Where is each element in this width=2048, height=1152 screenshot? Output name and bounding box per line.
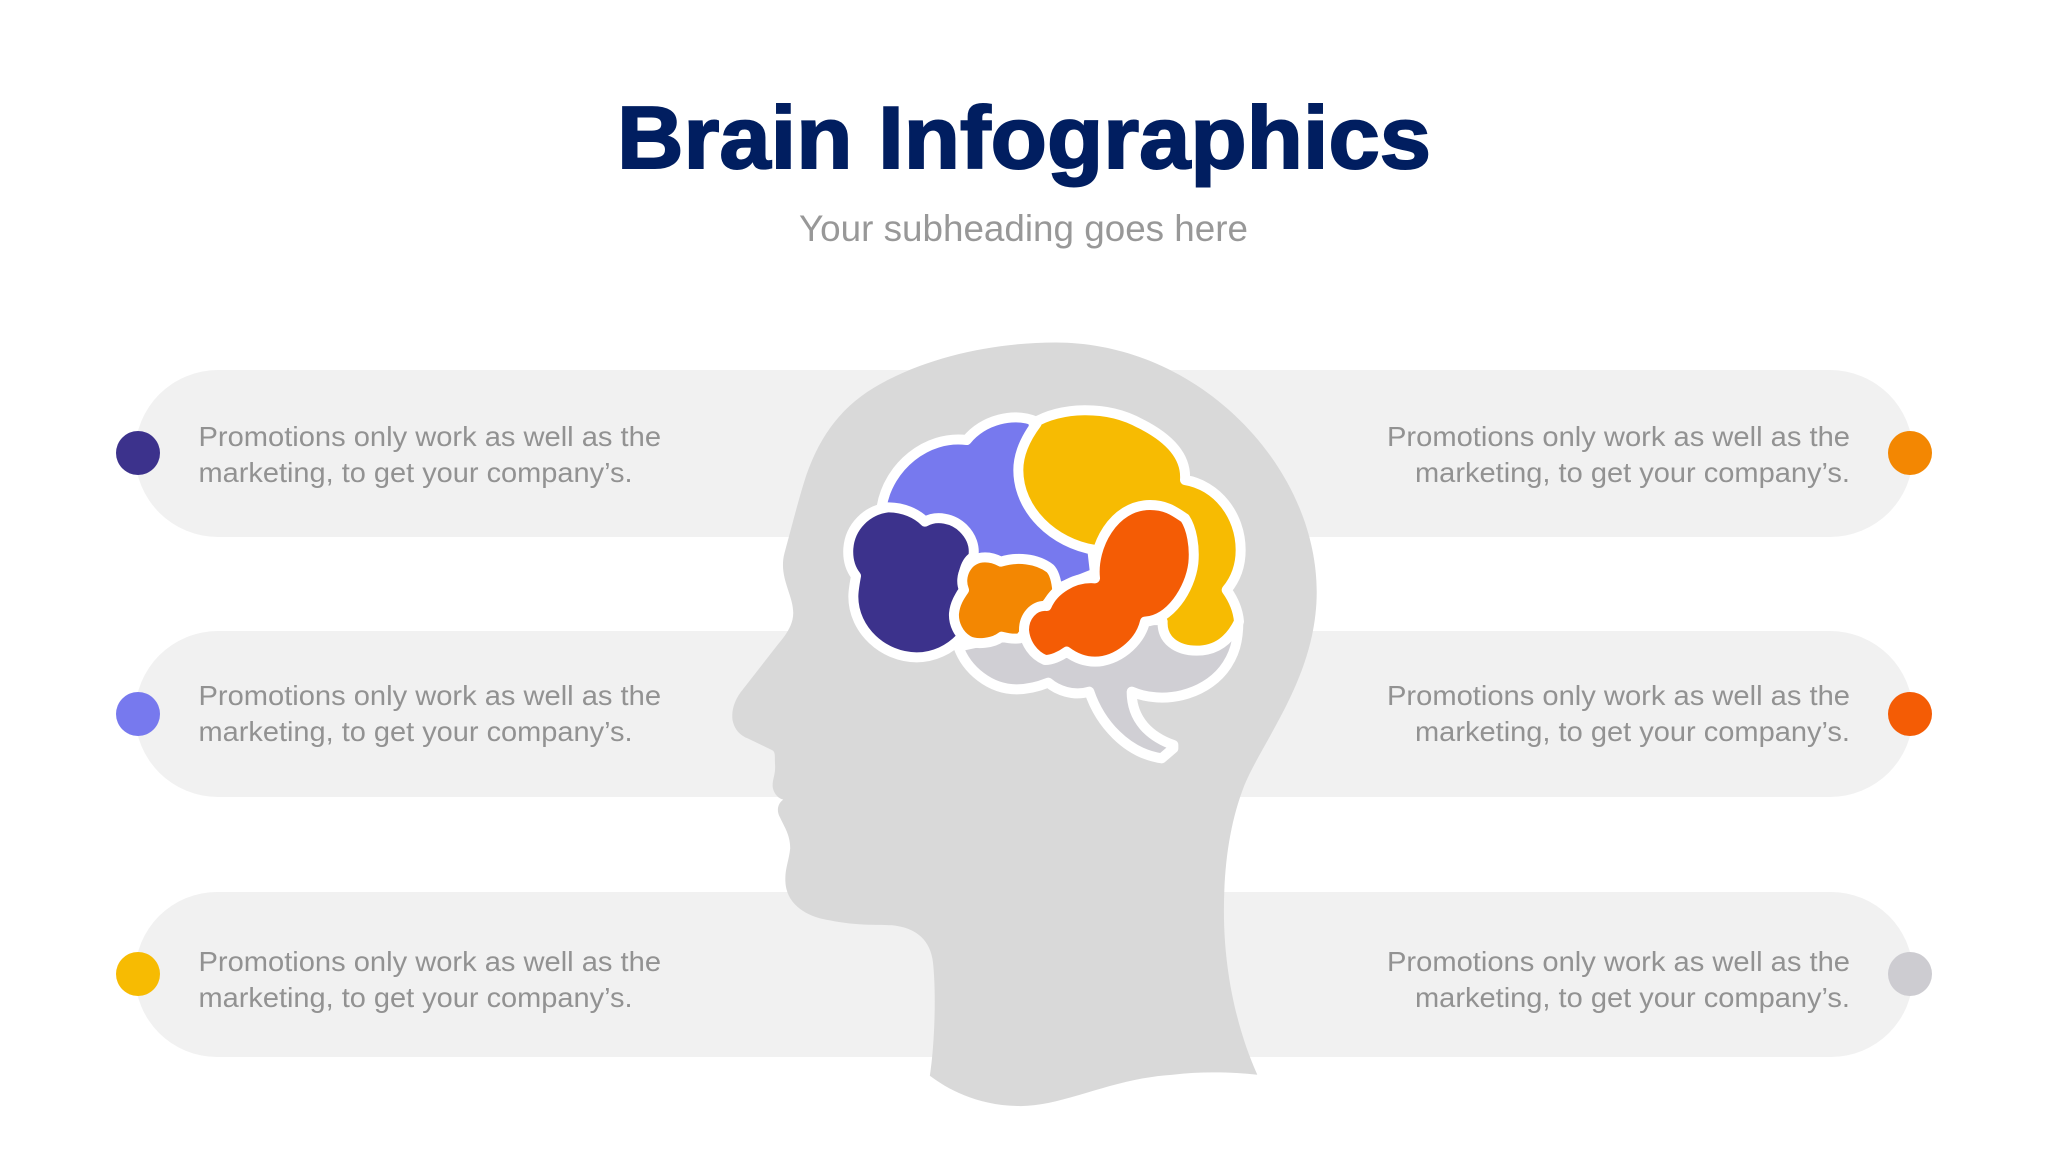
subheading: Your subheading goes here <box>799 208 1248 249</box>
text block: right row 3 <box>1387 946 1850 1013</box>
text block: right row 3: marketing, to get your company’s. <box>1415 982 1850 1013</box>
marker: indigo dot <box>116 431 160 475</box>
panel: right row 3 <box>1000 892 1913 1057</box>
text block: left row 2: Promotions only work as well as the <box>198 680 661 711</box>
head silhouette <box>732 342 1317 1106</box>
text block: left row 3: marketing, to get your company’s. <box>198 982 632 1013</box>
text block: left row 3 <box>198 946 661 1013</box>
panel: left row 3 <box>135 892 1100 1057</box>
marker: orange dot <box>1888 431 1932 475</box>
text block: right row 2: marketing, to get your company’s. <box>1415 716 1850 747</box>
text block: right row 2 <box>1387 680 1850 747</box>
brain lobe: yellow <box>1018 410 1241 651</box>
brain lobe: orange <box>954 557 1057 643</box>
panel: right row 2 <box>1000 631 1913 797</box>
title: Brain Infographics <box>617 88 1431 187</box>
marker: lilac dot <box>116 692 160 736</box>
brain lobe: lilac <box>882 417 1095 590</box>
brain lobe: dark indigo <box>848 507 974 657</box>
text block: right row 1 <box>1387 421 1850 488</box>
brain lobe: red-orange <box>1024 505 1194 662</box>
text block: left row 1: Promotions only work as well as the <box>198 421 661 452</box>
text block: right row 3: Promotions only work as well as the <box>1387 946 1850 977</box>
brain lobe: grey speech-bubble base <box>958 620 1238 758</box>
brain <box>848 410 1241 758</box>
marker: red-orange dot <box>1888 692 1932 736</box>
panel: left row 2 <box>135 631 1100 797</box>
text block: right row 1: marketing, to get your company’s. <box>1415 457 1850 488</box>
text block: right row 2: Promotions only work as well as the <box>1387 680 1850 711</box>
marker: yellow dot <box>116 952 160 996</box>
text block: left row 1: marketing, to get your company’s. <box>198 457 632 488</box>
text block: right row 1: Promotions only work as well as the <box>1387 421 1850 452</box>
text block: left row 2 <box>198 680 661 747</box>
panel: right row 1 <box>1000 370 1913 537</box>
text block: left row 3: Promotions only work as well as the <box>198 946 661 977</box>
text block: left row 2: marketing, to get your company’s. <box>198 716 632 747</box>
text block: left row 1 <box>198 421 661 488</box>
panel: left row 1 <box>135 370 1100 537</box>
marker: grey dot <box>1888 952 1932 996</box>
